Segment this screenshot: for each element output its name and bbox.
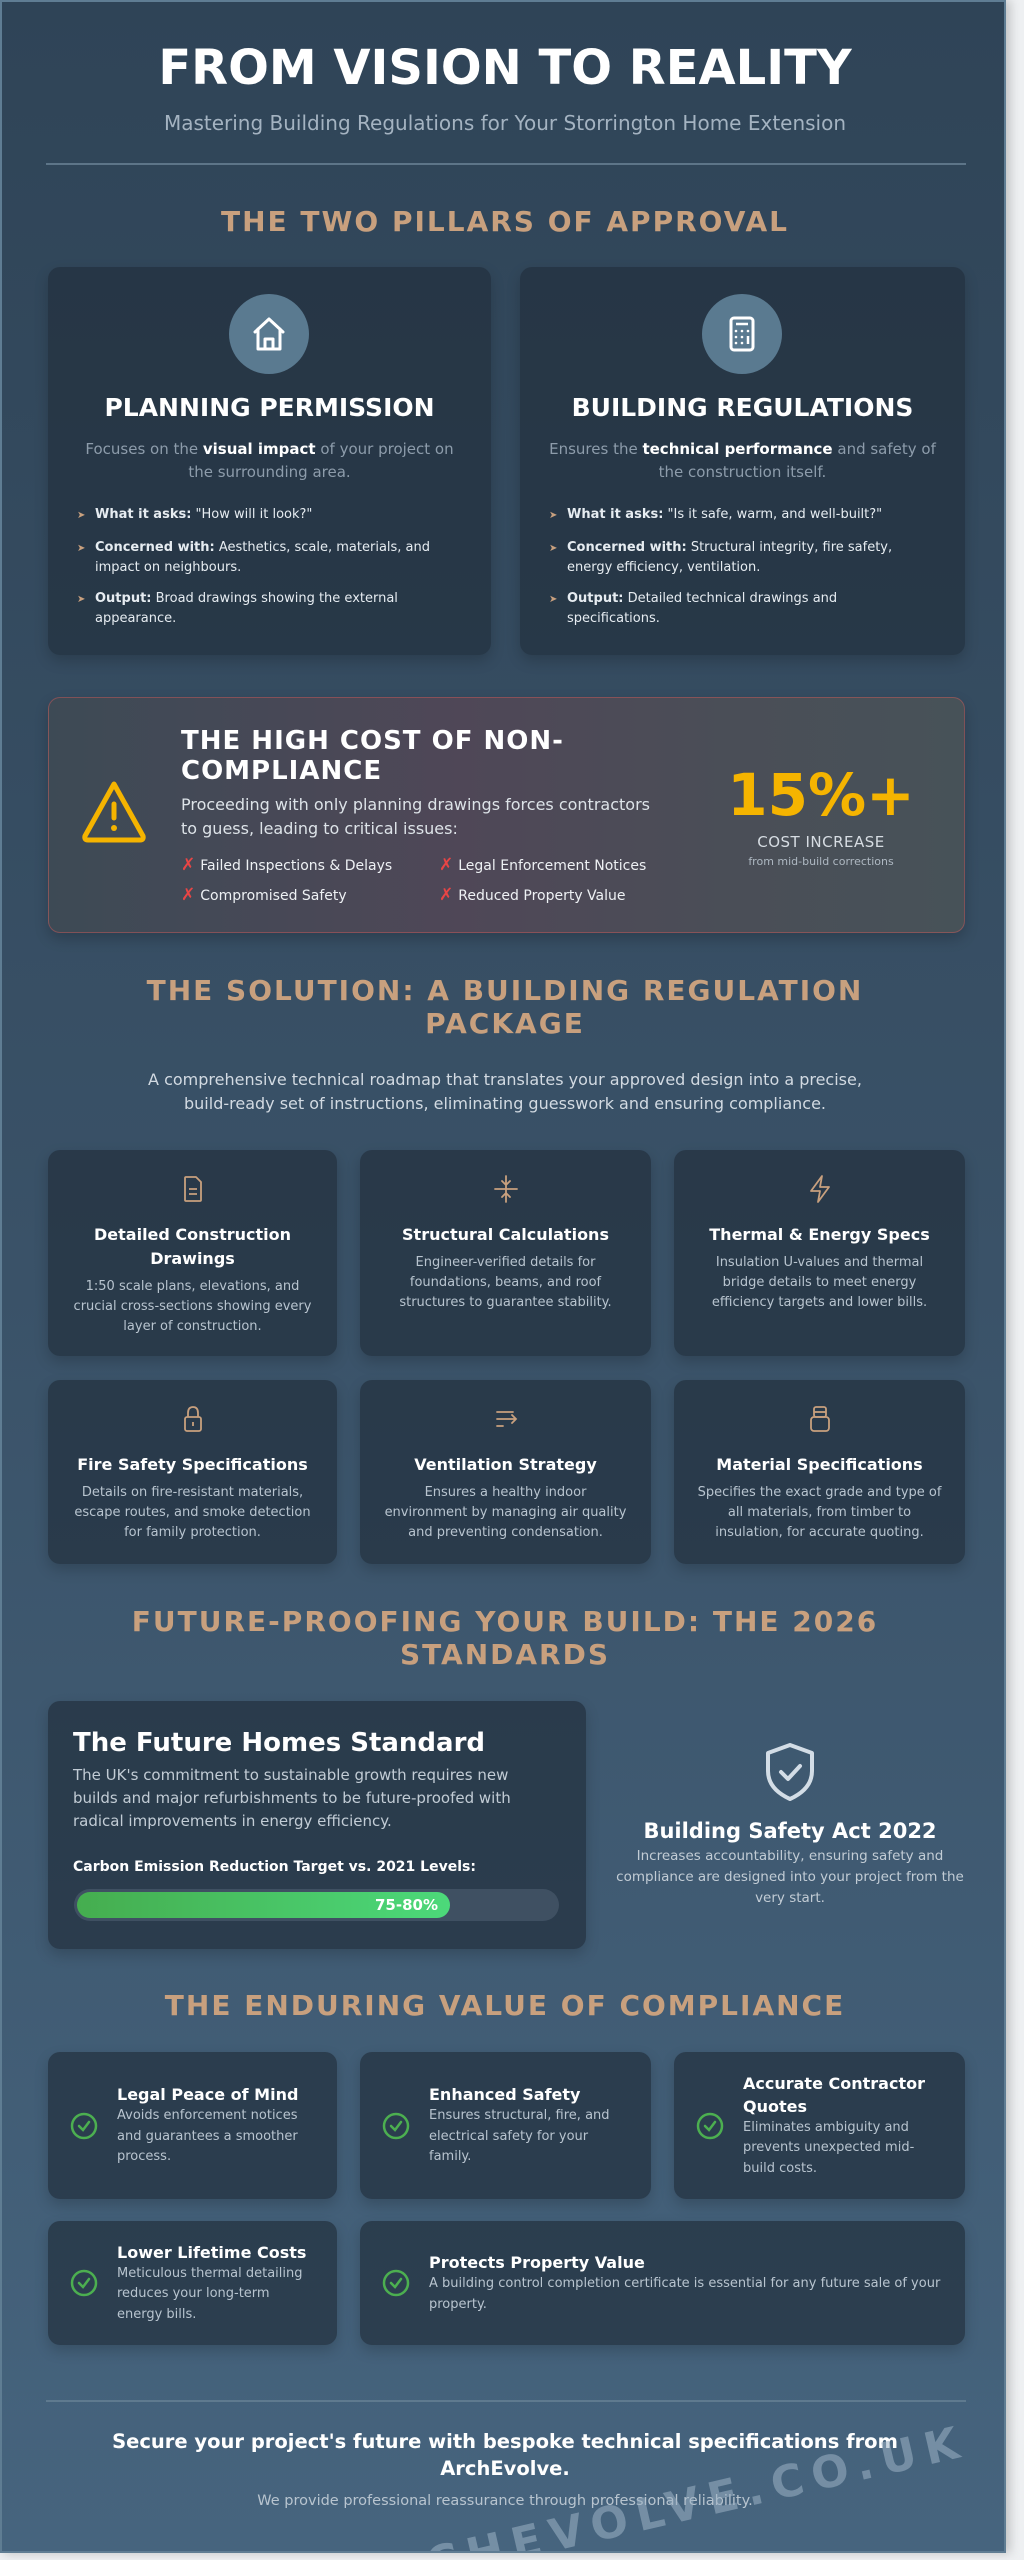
alert heading: THE HIGH COST OF NON-COMPLIANCE [181,726,564,786]
panel: future homes standard [48,1701,586,1949]
card: thermal: Thermal & Energy Specs [709,1225,930,1244]
bullet list: Output: Detailed technical drawings and specifications. [567,591,837,626]
card: ventilation: Ventilation Strategy [414,1455,597,1474]
bullet list: Output: Broad drawings showing the external appearance. [95,591,398,626]
description: Focuses on the visual impact of your project on the surrounding area. [85,440,454,481]
card: structural: Structural Calculations [402,1225,609,1244]
card: materials: Specifies the exact grade and type of all materials, from timber to insulation, for accurate quoting. [698,1485,941,1540]
icon: structure [494,1175,518,1203]
card: thermal [674,1150,965,1356]
card: fire safety [48,1380,337,1564]
bullet list: Concerned with: Structural integrity, fire safety, energy efficiency, ventilation. [567,540,892,575]
icon: house [229,294,309,374]
issue list: ✗ Legal Enforcement Notices [439,855,646,875]
card: drawings: Detailed Construction Drawings [94,1225,291,1268]
icon: shield [766,1743,814,1801]
alert text: Proceeding with only planning drawings forces contractors to guess, leading to critical issues: [181,795,650,838]
heading: future proofing: FUTURE-PROOFING YOUR BUILD: THE 2026 STANDARDS [132,1605,878,1671]
heading: The Future Homes Standard [73,1728,485,1758]
heading: enduring value: THE ENDURING VALUE OF COMPLIANCE [165,1989,845,2022]
card: thermal: Insulation U-values and thermal bridge details to meet energy efficiency targets and lower bills. [712,1255,927,1310]
issue list: ✗ Failed Inspections & Delays [181,855,392,875]
bullet list: What it asks: "How will it look?" [95,507,312,522]
card: materials: Material Specifications [716,1455,923,1474]
intro paragraph: A comprehensive technical roadmap that translates your approved design into a precise, build-ready set of instructions, eliminating guesswork and ensuring compliance. [148,1070,862,1113]
card: drawings [48,1150,337,1356]
bullet list [550,507,892,626]
stat: 15%: from mid-build corrections [748,855,894,868]
stat: 15%: COST INCREASE [757,833,885,851]
call to action: Secure your project's future with bespoke technical specifications from ArchEvolve. [112,2430,898,2480]
card: materials [674,1380,965,1564]
value: lifetime costs [48,2221,337,2345]
issue list: ✗ Reduced Property Value [439,885,626,905]
progress bar [74,1889,559,1921]
value: property: Protects Property Value [429,2253,645,2272]
text: The UK's commitment to sustainable growth requires new builds and major refurbishments to be future-proofed with radical improvements in energy efficiency. [73,1766,511,1830]
value: legal [48,2052,337,2199]
title: FROM VISION TO REALITY [158,40,852,96]
heading: PLANNING PERMISSION [104,393,435,422]
value: property: A building control completion certificate is essential for any future sale of your property. [429,2276,940,2312]
icon: bolt [810,1175,830,1203]
icon: document [184,1176,202,1202]
value: quotes [674,2052,965,2199]
card: drawings: 1:50 scale plans, elevations, and crucial cross-sections showing every layer of construction. [74,1279,311,1334]
footer note: We provide professional reassurance through professional reliability. [257,2493,753,2509]
card: ventilation [360,1380,651,1564]
value: legal: Avoids enforcement notices and guarantees a smoother process. [117,2108,298,2164]
bullet list [78,507,430,626]
icon: lock [184,1406,202,1432]
panel: building safety act [616,1743,964,1906]
stat: 15% [727,761,915,868]
chart label: Carbon Emission Reduction Target vs. 2021 Levels: [73,1859,476,1875]
card: fire safety: Details on fire-resistant materials, escape routes, and smoke detection for family protection. [74,1485,311,1540]
card: structural: Engineer-verified details for foundations, beams, and roof structures to guarantee stability. [399,1255,612,1310]
value: lifetime costs: Lower Lifetime Costs [117,2243,306,2262]
value: quotes: Eliminates ambiguity and prevents unexpected mid-build costs. [743,2120,914,2176]
panel: planning permission [48,267,491,655]
panel: building safety act: Building Safety Act 2022 [643,1819,937,1843]
icon: airflow [496,1411,518,1427]
value: quotes: Accurate Contractor Quotes [743,2074,925,2116]
heading: solution: THE SOLUTION: A BUILDING REGULATION PACKAGE [147,974,863,1040]
icon: warning [82,782,146,842]
card: structural [360,1150,651,1356]
panel: building regulations [520,267,965,655]
card: fire safety: Fire Safety Specifications [77,1455,308,1474]
value: safety: Enhanced Safety [429,2085,580,2104]
value: lifetime costs: Meticulous thermal detailing reduces your long-term energy bills. [117,2266,302,2322]
heading: two pillars: THE TWO PILLARS OF APPROVAL [221,205,789,238]
value: safety: Ensures structural, fire, and electrical safety for your family. [429,2108,610,2164]
value: legal: Legal Peace of Mind [117,2085,298,2104]
description: Ensures the technical performance and safety of the construction itself. [549,440,936,481]
panel: high cost of non-compliance [48,697,965,933]
icon: materials [810,1406,830,1432]
bullet list: Concerned with: Aesthetics, scale, materials, and impact on neighbours. [95,540,430,575]
heading: BUILDING REGULATIONS [572,393,913,422]
issue list: ✗ Compromised Safety [181,885,347,905]
value: safety [360,2052,651,2199]
value: property [360,2221,965,2345]
icon: calculator [702,294,782,374]
bullet list: What it asks: "Is it safe, warm, and well-built?" [567,507,882,522]
panel: building safety act: Increases accountability, ensuring safety and compliance are designed into your project from the very start. [616,1848,964,1906]
stat: 15%: 15%+ [727,761,915,829]
progress bar: 75-80% [375,1896,438,1914]
subtitle: Mastering Building Regulations for Your Storrington Home Extension [164,111,846,135]
issue list [181,855,646,905]
card: ventilation: Ensures a healthy indoor environment by managing air quality and preventing condensation. [385,1485,626,1540]
